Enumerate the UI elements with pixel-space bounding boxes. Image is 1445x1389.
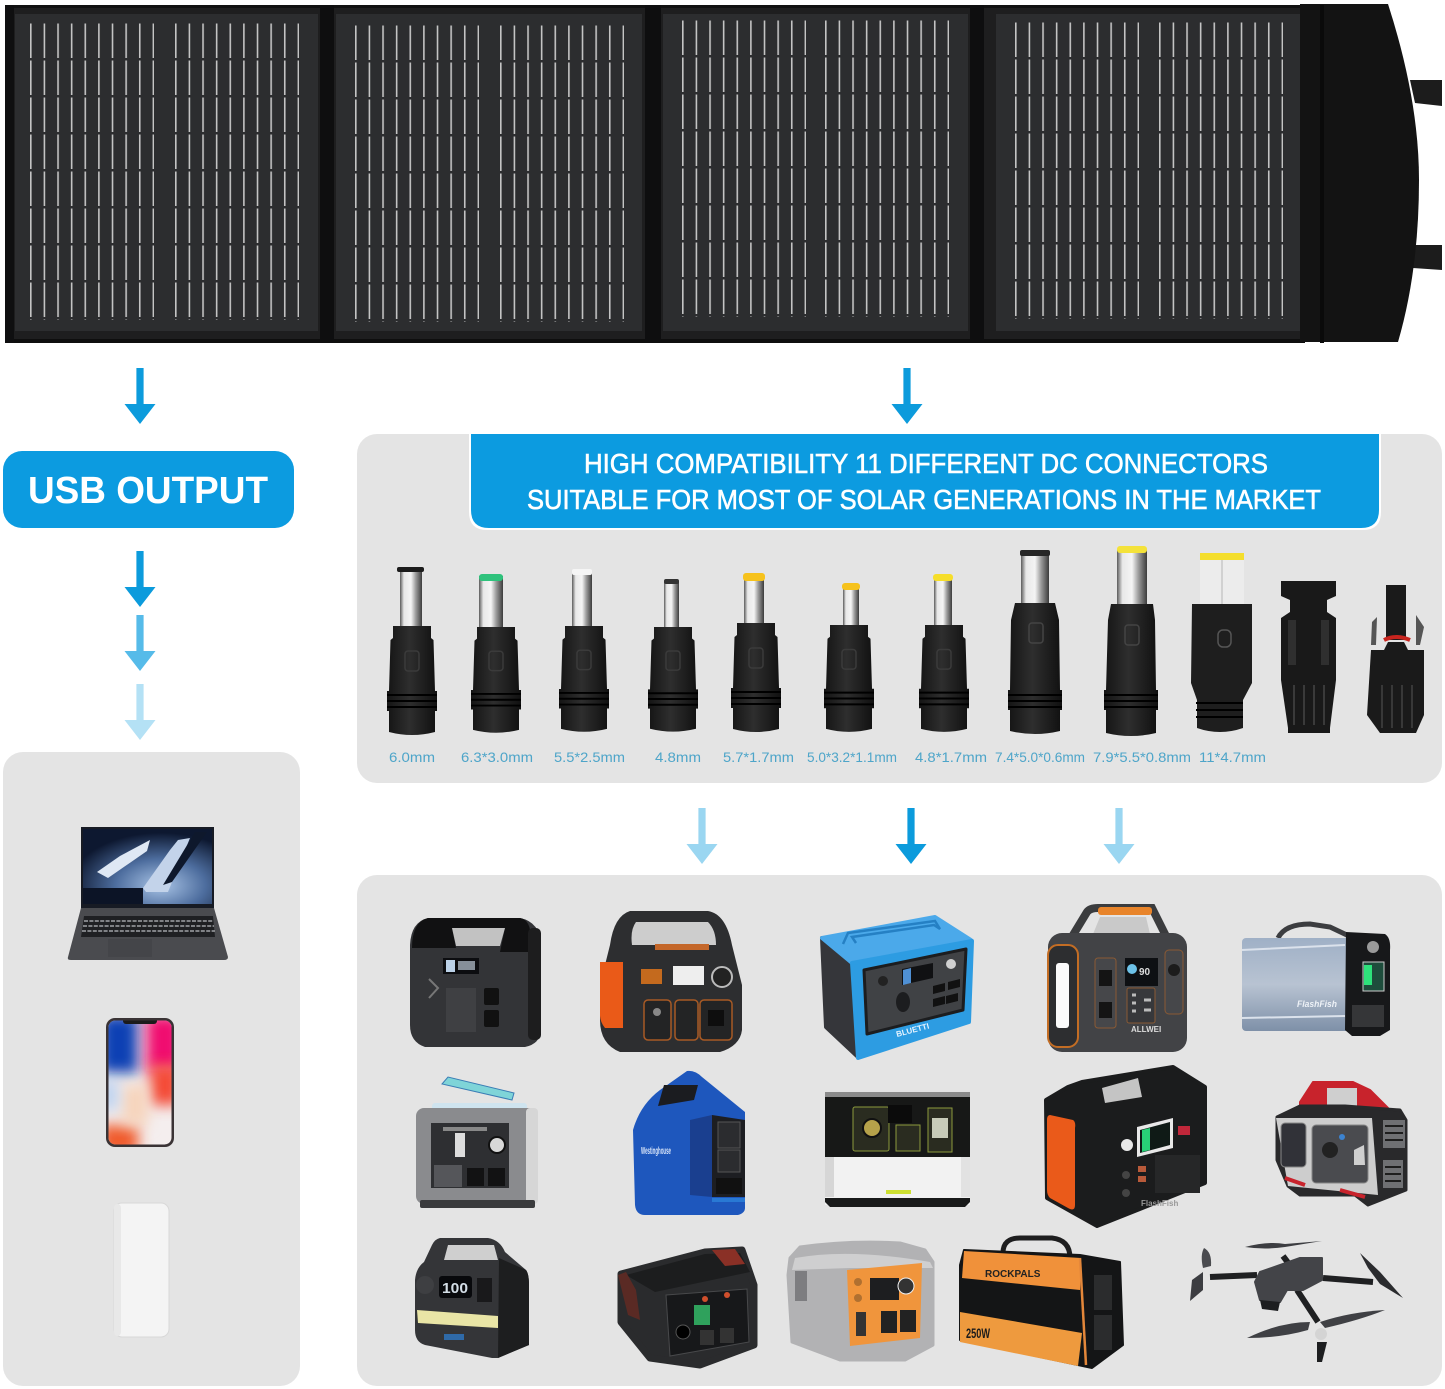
solar module 1 — [15, 14, 318, 331]
folding flap with straps — [1300, 4, 1442, 343]
arrows: connectors to power stations — [686, 808, 1134, 864]
USB output badge: USB OUTPUT — [28, 470, 268, 512]
power station 11 — [415, 1238, 529, 1358]
power station 3: BLUETTI — [895, 1021, 930, 1039]
power station 3 — [822, 917, 972, 1058]
connector 6.3*3.0mm: 6.3*3.0mm — [461, 749, 533, 765]
connector 5.7*1.7mm: 5.7*1.7mm — [723, 749, 794, 765]
drone — [1190, 1241, 1403, 1362]
connector 4.8mm — [648, 579, 701, 765]
power station 9: FlashFish — [1141, 1199, 1178, 1208]
icon: laptop — [68, 827, 228, 960]
power station 13 — [788, 1242, 933, 1360]
icon: power bank — [114, 1203, 169, 1337]
power station 10 — [1276, 1082, 1406, 1205]
power station 7: Westinghouse — [641, 1146, 671, 1157]
connector 6.0mm — [387, 567, 437, 765]
solar panel — [5, 4, 1442, 343]
power station 5: FlashFish — [1297, 999, 1337, 1009]
connector 5.0*3.2*1.1mm: 5.0*3.2*1.1mm — [807, 749, 897, 765]
power station 14: 250W — [966, 1325, 991, 1341]
power station 11: 100 — [442, 1280, 468, 1297]
connector 4.8mm: 4.8mm — [655, 749, 701, 765]
connector MC4 male — [1367, 585, 1424, 733]
power station 12 — [618, 1249, 754, 1365]
connector MC4 female — [1281, 581, 1336, 733]
power station 1 — [410, 918, 541, 1047]
connector 7.9*5.5*0.8mm — [1093, 546, 1191, 765]
arrow: panel to USB output — [124, 368, 156, 424]
power station 7 — [633, 1071, 745, 1215]
connector 5.7*1.7mm — [723, 573, 794, 765]
solar module 4 — [996, 14, 1300, 331]
connector 11*4.7mm — [1191, 553, 1266, 765]
power station 5 — [1242, 924, 1390, 1036]
icon: smartphone — [106, 1018, 174, 1147]
solar module 2 — [336, 14, 642, 331]
USB output badge — [3, 451, 294, 528]
connector 5.5*2.5mm: 5.5*2.5mm — [554, 749, 625, 765]
connector 7.4*5.0*0.6mm: 7.4*5.0*0.6mm — [995, 749, 1085, 765]
arrow: panel to DC connectors — [892, 368, 922, 424]
power station 4: ALLWEI — [1131, 1025, 1161, 1034]
power station 14 — [960, 1238, 1123, 1368]
power station 4 — [1048, 907, 1187, 1052]
connector 7.4*5.0*0.6mm — [995, 550, 1085, 765]
connector 5.0*3.2*1.1mm — [807, 583, 897, 765]
connector 11*4.7mm: 11*4.7mm — [1199, 749, 1266, 765]
connector 4.8*1.7mm — [915, 574, 987, 765]
power station 9 — [1046, 1067, 1205, 1226]
panel: power stations — [357, 875, 1442, 1386]
power station 4: 90 — [1139, 967, 1151, 978]
heading banner — [469, 434, 1381, 530]
power station 2 — [600, 911, 742, 1052]
connector 6.3*3.0mm — [461, 574, 533, 765]
solar module 3 — [663, 14, 968, 331]
panel: USB devices — [3, 752, 300, 1386]
panel: DC connectors — [357, 434, 1442, 783]
arrows: USB output to devices — [124, 551, 156, 740]
connector 7.9*5.5*0.8mm: 7.9*5.5*0.8mm — [1093, 749, 1191, 765]
connector 4.8*1.7mm: 4.8*1.7mm — [915, 749, 987, 765]
power station 6 — [416, 1077, 538, 1208]
power station 14: ROCKPALS — [985, 1269, 1041, 1280]
connector 5.5*2.5mm — [554, 569, 625, 765]
connector 6.0mm: 6.0mm — [389, 749, 435, 765]
power station 8 — [825, 1092, 970, 1207]
heading banner: SUITABLE FOR MOST OF SOLAR GENERATIONS IN THE MARKET — [527, 484, 1321, 515]
heading banner: HIGH COMPATIBILITY 11 DIFFERENT DC CONNECTORS — [584, 448, 1268, 479]
